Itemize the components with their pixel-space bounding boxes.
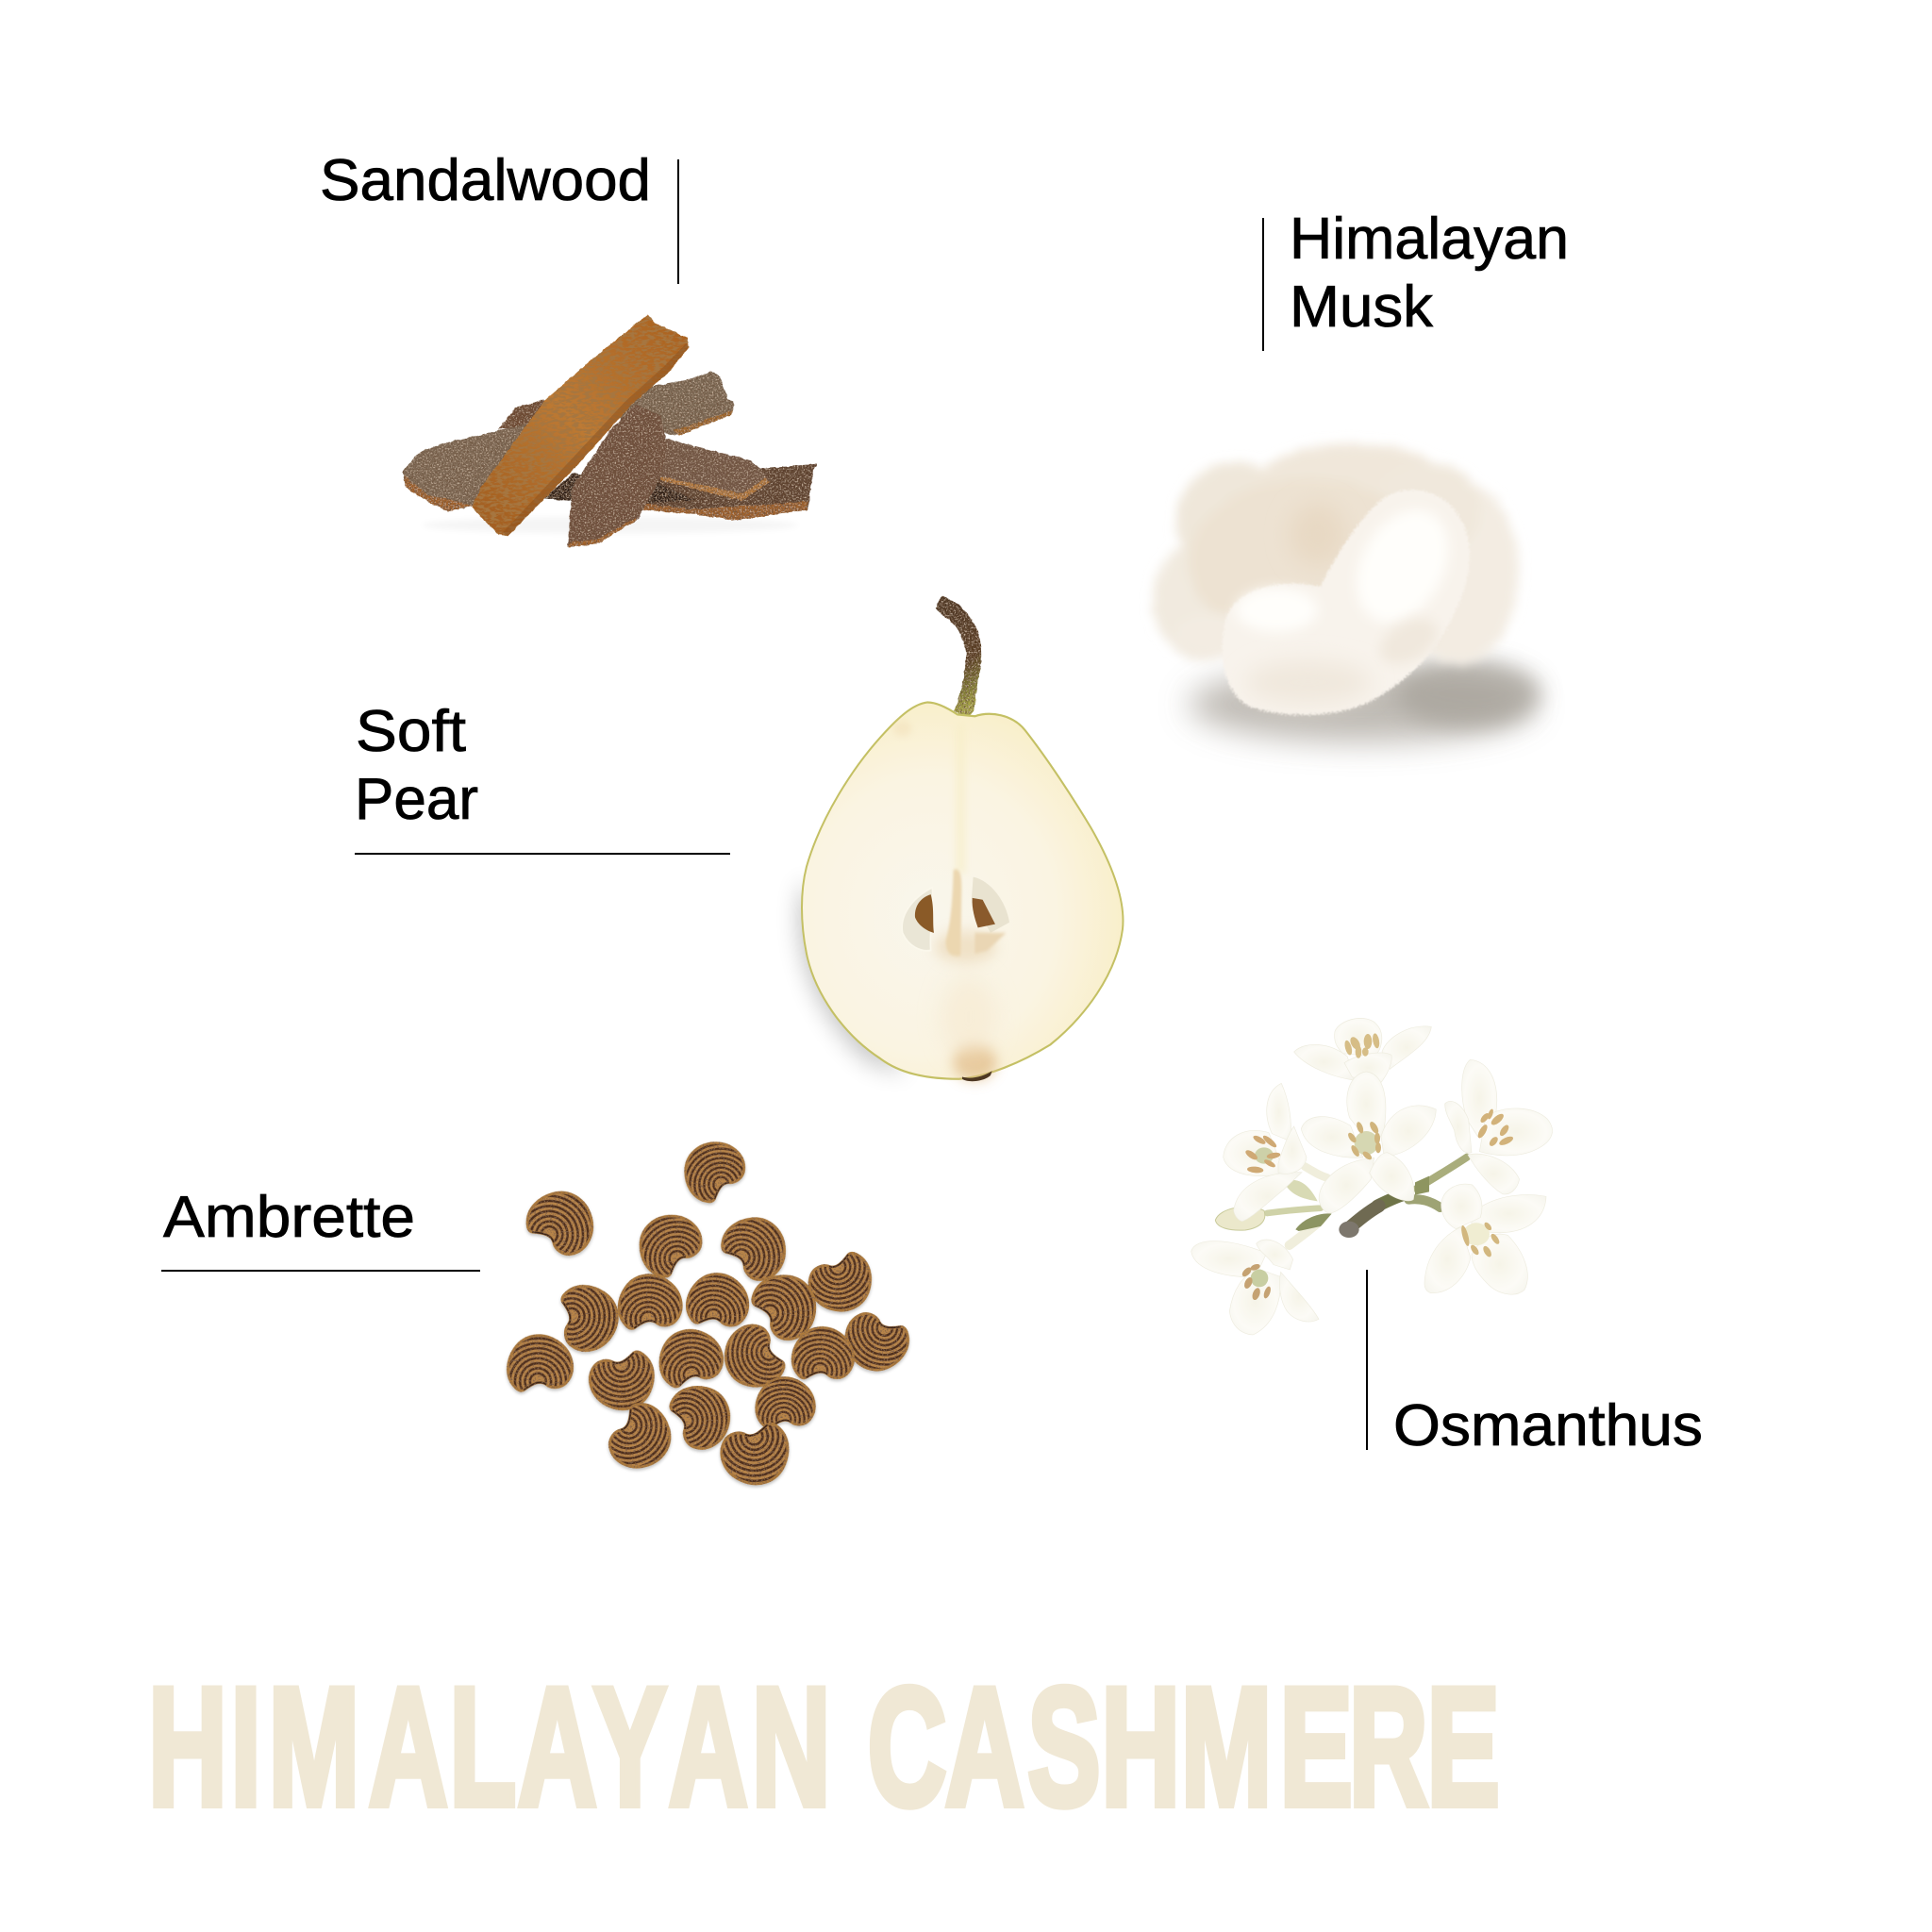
shadow — [1189, 660, 1541, 742]
stems — [1267, 1158, 1467, 1245]
label: Soft Pear: Soft — [356, 699, 466, 764]
label: Soft Pear — [355, 699, 730, 855]
back cloud — [1153, 443, 1519, 663]
central vein — [956, 724, 966, 874]
blossom end — [962, 1071, 992, 1081]
flower: lower right — [1424, 1184, 1546, 1294]
label: Ambrette: Ambrette — [163, 1185, 415, 1250]
illustration: osmanthus flowers — [1191, 1018, 1552, 1335]
front lobes — [1223, 490, 1470, 715]
pear shadow — [798, 880, 906, 1073]
stem — [936, 597, 981, 720]
label: Soft Pear: Pear — [355, 767, 478, 832]
label: Himalayan Musk — [1262, 207, 1569, 351]
flower: top — [1294, 1018, 1431, 1083]
flesh — [802, 702, 1123, 1079]
illustration: cotton musk — [1153, 443, 1541, 742]
flower: centre — [1301, 1072, 1436, 1213]
illustration: halved pear — [798, 597, 1123, 1081]
label: Himalayan Musk: Himalayan — [1290, 207, 1569, 272]
title: HIMALAYAN CASHMERE: HIMALAYAN CASHMERE — [148, 1653, 1500, 1840]
illustration: sandalwood bark pieces — [403, 314, 818, 547]
label: Himalayan Musk: Musk — [1290, 275, 1434, 340]
flower: lower left — [1191, 1240, 1319, 1335]
bud — [1215, 1207, 1265, 1230]
label: Sandalwood: Sandalwood — [320, 148, 651, 213]
core — [902, 869, 1009, 956]
flower: left — [1224, 1083, 1307, 1222]
illustration: ambrette seeds — [478, 1143, 941, 1496]
flower: right — [1445, 1059, 1552, 1194]
label: Osmanthus: Osmanthus — [1393, 1393, 1703, 1458]
